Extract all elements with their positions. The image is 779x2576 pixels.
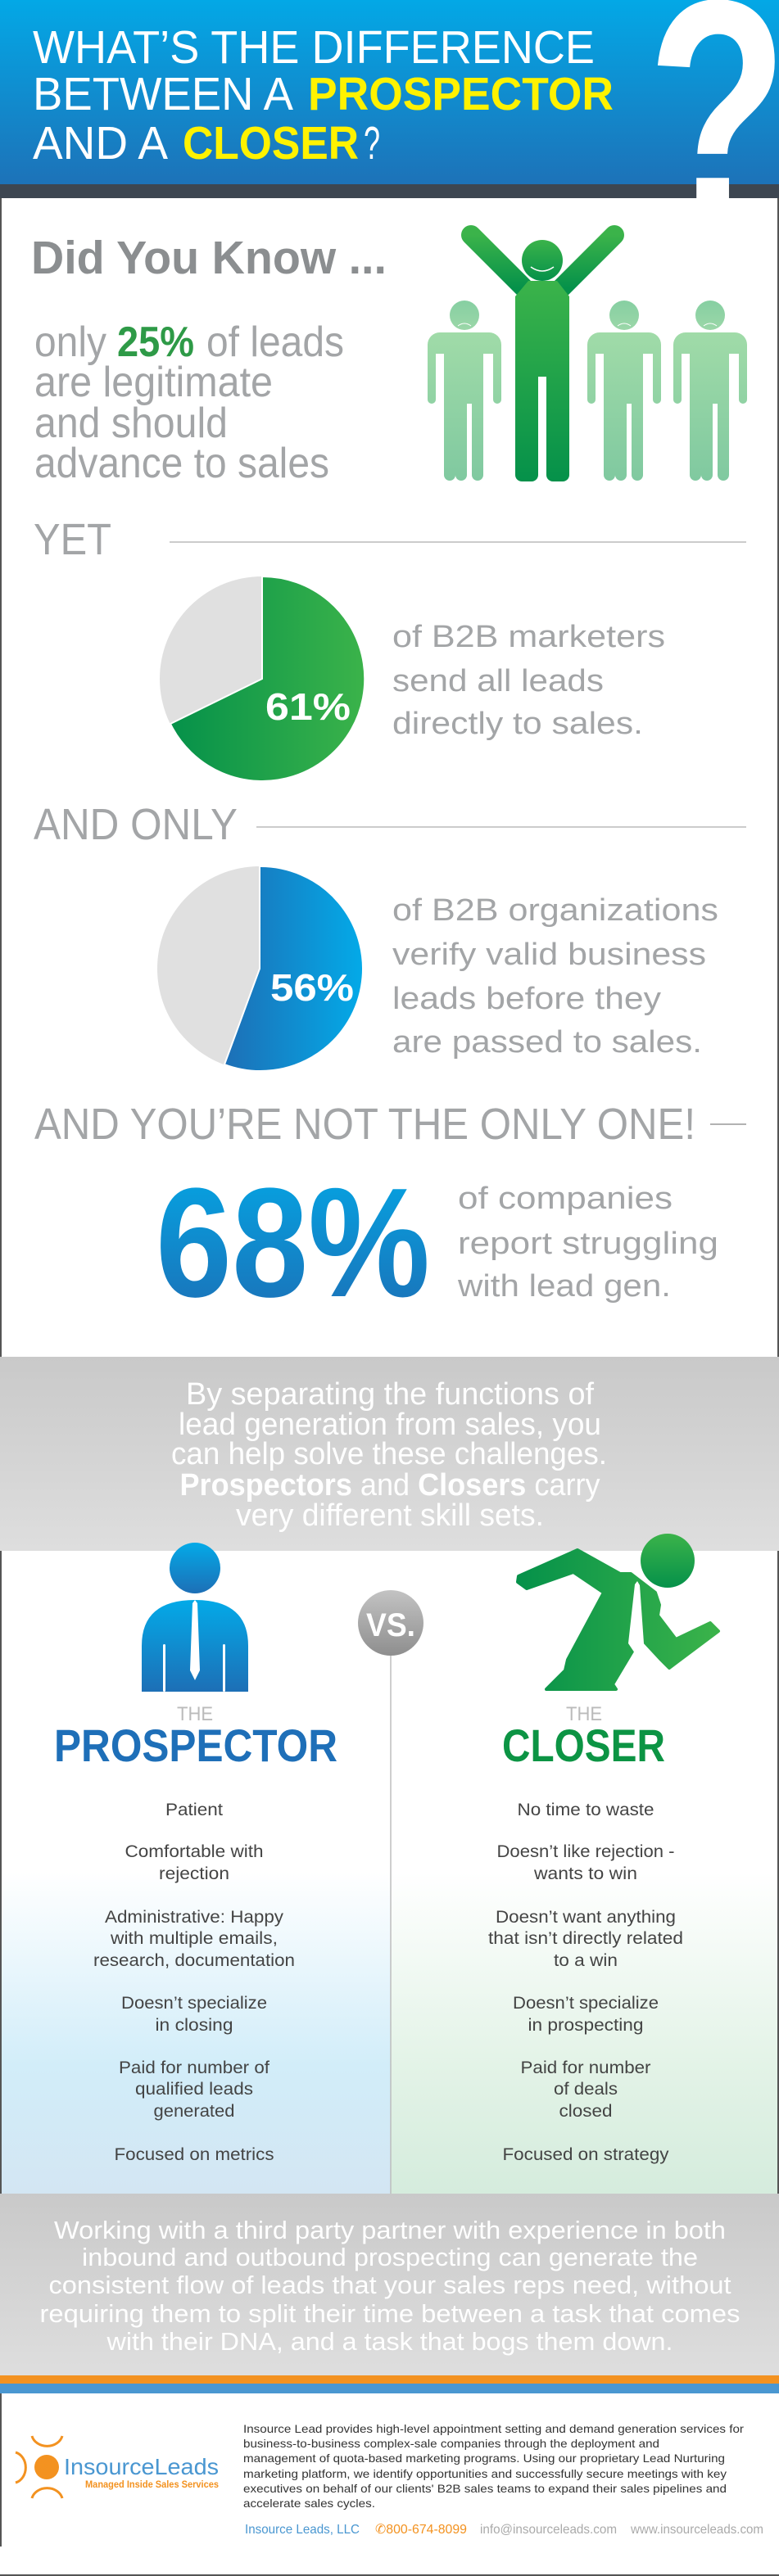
logo: insource leads: Managed Inside Sales Services (85, 2479, 219, 2490)
text: b2b marketers (392, 620, 665, 741)
list: prospector traits: Comfortable with (125, 1842, 264, 1861)
text: companies struggling: report struggling (458, 1227, 718, 1261)
list: closer traits: that isn’t directly related (488, 1929, 683, 1948)
panel: third party partner: with their DNA, and a task that bogs them down. (106, 2327, 673, 2356)
text block: 25% of leads: advance to sales (34, 440, 329, 487)
heading: did you know: Did You Know ... (31, 232, 387, 284)
panel: third party partner: consistent flow of leads that your sales reps need, without (49, 2271, 731, 2299)
text: b2b organizations: leads before they (392, 982, 661, 1016)
pie chart: 61% (160, 576, 365, 781)
text: b2b organizations (392, 893, 718, 1060)
panel: separating functions: Prospectors and Closers carry (180, 1468, 600, 1503)
text block: 25% of leads: and should (34, 400, 228, 447)
list: closer traits: wants to win (533, 1864, 637, 1883)
icon: vs badge (358, 1590, 423, 1656)
heading: the prospector: PROSPECTOR (54, 1720, 337, 1771)
text: b2b marketers: send all leads (392, 664, 604, 698)
title: ? (364, 117, 380, 169)
list: prospector traits: Paid for number of (119, 2059, 269, 2077)
title: BETWEEN A (33, 68, 293, 120)
list: closer traits: to a win (554, 1951, 618, 1970)
contact line: ✆800-674-8099 (375, 2523, 467, 2537)
list: prospector traits: with multiple emails, (110, 1929, 278, 1948)
pie chart: 56% (157, 866, 363, 1071)
text: b2b marketers: of B2B marketers (392, 620, 665, 654)
title: CLOSER (183, 117, 359, 169)
icon: vs badge: VS. (366, 1607, 415, 1643)
list: prospector traits: in closing (156, 2016, 233, 2035)
list: closer traits: Paid for number (521, 2059, 650, 2077)
list: closer traits: No time to waste (518, 1801, 654, 1819)
list: closer traits (488, 1801, 683, 2164)
heading: the closer (502, 1703, 665, 1771)
text block: company description: executives on behalf of our clients' B2B sales teams to expand their sales pipelines and (243, 2482, 727, 2495)
icon: happy person (471, 235, 614, 481)
list: prospector traits: Administrative: Happy (105, 1908, 284, 1927)
heading: not the only one: AND YOU’RE NOT THE ONLY ONE! (34, 1100, 695, 1149)
text block: company description: accelerate sales cycles. (243, 2497, 375, 2510)
list: prospector traits: qualified leads (135, 2080, 253, 2099)
list: prospector traits: Patient (165, 1801, 223, 1819)
list: prospector traits (93, 1801, 295, 2164)
heading: the closer: CLOSER (502, 1720, 665, 1771)
icon: prospector (142, 1543, 248, 1692)
title: AND A (33, 117, 168, 169)
text block: company description: marketing platform, we identify opportunities and successfully secure meetings with key (243, 2467, 727, 2480)
panel: third party partner: Working with a third party partner with experience in both (54, 2216, 726, 2244)
icon: closer runner (518, 1534, 718, 1689)
list: closer traits: closed (559, 2102, 613, 2121)
logo: insource leads: InsourceLeads (64, 2454, 219, 2479)
list: prospector traits: rejection (159, 1864, 229, 1883)
heading: yet: YET (34, 515, 111, 564)
panel: separating functions: lead generation from sales, you (179, 1408, 601, 1442)
panel: separating functions (0, 1357, 779, 1551)
list: closer traits: Doesn’t specialize (513, 1994, 659, 2013)
text: b2b organizations: are passed to sales. (392, 1025, 702, 1060)
text: b2b organizations: verify valid business (392, 938, 706, 972)
contact line (245, 2523, 763, 2537)
panel: third party partner: requiring them to split their time between a task that comes (39, 2299, 741, 2328)
logo: insource leads (16, 2436, 219, 2498)
icon: people group (428, 235, 747, 481)
text: companies struggling (457, 1182, 718, 1304)
text: b2b organizations: of B2B organizations (392, 893, 718, 928)
footer stripes (0, 2375, 779, 2393)
text block: 25% of leads: only (34, 319, 106, 366)
text block: company description: business-to-business complex-sale companies through the deployment and (243, 2437, 659, 2450)
pie chart: 56%: 56% (270, 966, 354, 1009)
text block: 25% of leads: 25% (117, 319, 194, 366)
text block: 25% of leads: of leads (206, 319, 344, 366)
panel: comparison columns (2, 1534, 777, 2194)
title (33, 21, 614, 169)
text block: company description: management of quota-based marketing programs. Using our proprietary Lead Nurturing (243, 2452, 725, 2465)
heading: the prospector: THE (177, 1703, 213, 1725)
panel: third party partner (0, 2194, 779, 2375)
list: prospector traits: Focused on metrics (115, 2145, 274, 2164)
icon: sad people (428, 301, 747, 481)
text block: 25% of leads (34, 319, 344, 487)
text: companies struggling: with lead gen. (457, 1269, 671, 1304)
list: closer traits: Doesn’t like rejection - (496, 1842, 675, 1861)
title: WHAT’S THE DIFFERENCE (33, 21, 595, 74)
text block: company description (243, 2422, 744, 2510)
panel: third party partner: inbound and outbound prospecting can generate the (82, 2243, 698, 2271)
panel: separating functions: can help solve these challenges. (171, 1437, 607, 1471)
list: prospector traits: generated (154, 2102, 234, 2121)
text: companies struggling: of companies (458, 1182, 673, 1216)
list: closer traits: in prospecting (528, 2016, 644, 2035)
contact line: info@insourceleads.com (480, 2523, 617, 2537)
heading: and only: AND ONLY (34, 800, 238, 849)
text: b2b marketers: directly to sales. (392, 707, 643, 741)
header (0, 0, 779, 198)
panel: separating functions: very different skill sets. (236, 1498, 544, 1533)
pie chart: 61%: 61% (265, 685, 351, 728)
text block: company description: Insource Lead provides high-level appointment setting and demand generation services for (243, 2422, 744, 2435)
list: closer traits: Doesn’t want anything (496, 1908, 676, 1927)
heading: the closer: THE (566, 1703, 602, 1725)
list: closer traits: of deals (554, 2080, 618, 2099)
panel: separating functions: By separating the functions of (186, 1377, 594, 1412)
text block: 25% of leads: are legitimate (34, 359, 273, 406)
contact line: Insource Leads, LLC (245, 2523, 360, 2537)
heading: the prospector (54, 1703, 337, 1771)
list: prospector traits: Doesn’t specialize (121, 1994, 267, 2013)
title: PROSPECTOR (308, 68, 614, 120)
list: closer traits: Focused on strategy (503, 2145, 669, 2164)
big stat: 68%: 68% (156, 1156, 430, 1330)
list: prospector traits: research, documentation (93, 1951, 295, 1970)
contact line: www.insourceleads.com (630, 2523, 763, 2537)
